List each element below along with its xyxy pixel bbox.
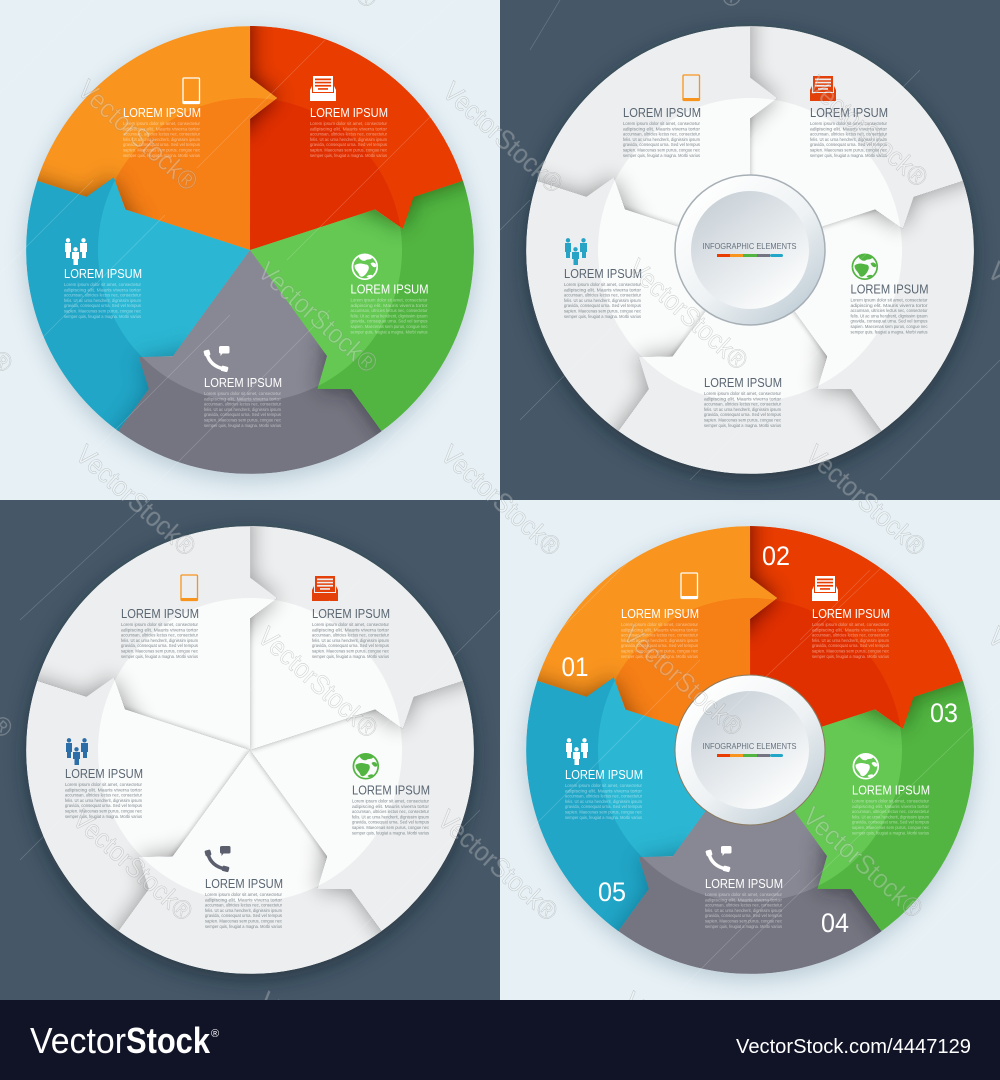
text block: grey: felis. Ut ac urna hendrerit, dignissim ipsum: [204, 407, 281, 412]
text block: grey: [204, 376, 282, 428]
text block: top right: LOREM IPSUM: [312, 607, 390, 621]
text block: left: adipiscing elit. Mauris viverra tortor: [564, 287, 641, 292]
segment: blue: [26, 178, 250, 431]
text block: bottom: accumsan, ultricies lectus nec, consectetur: [205, 903, 282, 908]
text block: right: sapien. Maecenas sem purus, congue nec: [850, 324, 928, 329]
text block: grey: semper quis, feugiat a magna. Morbi varius: [705, 924, 783, 929]
text block: grey: semper quis, feugiat a magna. Morbi varius: [204, 423, 282, 428]
text block: top right: felis. Ut ac urna hendrerit, dignissim ipsum: [810, 137, 887, 142]
text block: red: gravida, consequat urna. Sed vel tempus: [310, 142, 388, 147]
text block: right: semper quis, feugiat a magna. Morbi varius: [352, 830, 430, 835]
segment: green: [250, 180, 474, 431]
text block: green: Lorem ipsum dolor sit amet, consectetur: [852, 798, 929, 804]
text block: grey: [705, 877, 783, 929]
text block: top right: LOREM IPSUM: [810, 106, 888, 120]
panel: white pie with hub: [518, 24, 982, 488]
panel: coloured pie with hub and numbers: [516, 522, 984, 990]
segment: top left: [37, 526, 277, 750]
text block: red: [310, 106, 388, 158]
watermarks: VectorStock®: [252, 256, 384, 379]
text block: left: sapien. Maecenas sem purus, congue nec: [564, 308, 642, 314]
text block: right: felis. Ut ac urna hendrerit, dignissim ipsum: [850, 313, 928, 318]
watermarks: VectorStock®: [800, 439, 932, 562]
text block: orange: [123, 106, 201, 158]
text block: top left: sapien. Maecenas sem purus, congue nec: [623, 148, 701, 152]
segment: bottom: [618, 311, 882, 474]
segment: blue: [526, 678, 706, 931]
segment: green: [794, 680, 974, 931]
text block: top right: adipiscing elit. Mauris viverra tortor: [810, 126, 887, 131]
text block: red: adipiscing elit. Mauris viverra tortor: [310, 126, 387, 131]
text block: top right: accumsan, ultricies lectus nec, consectetur: [312, 633, 389, 638]
text block: left: felis. Ut ac urna hendrerit, dignissim ipsum: [65, 798, 142, 803]
text block: green: gravida, consequat urna. Sed vel tempus: [852, 820, 930, 825]
panel: coloured pie without hub: [16, 22, 484, 490]
footer bar: [0, 1000, 1000, 1080]
watermarks: VectorStock®: [70, 439, 202, 562]
text block: red: LOREM IPSUM: [812, 607, 890, 621]
text block: left: sapien. Maecenas sem purus, congue nec: [65, 808, 143, 814]
text block: red: Lorem ipsum dolor sit amet, consectetur: [310, 121, 387, 126]
footer bar: VectorStock.com/4447129: [736, 1036, 971, 1058]
text block: green: sapien. Maecenas sem purus, congue nec: [852, 825, 930, 830]
text block: blue: Lorem ipsum dolor sit amet, consectetur: [565, 783, 642, 788]
text block: top right: felis. Ut ac urna hendrerit, dignissim ipsum: [312, 638, 389, 643]
text block: grey: adipiscing elit. Mauris viverra tortor: [705, 897, 782, 902]
text block: top left: gravida, consequat urna. Sed vel tempus: [623, 142, 701, 147]
text block: right: LOREM IPSUM: [850, 282, 928, 296]
panel background: top right: [500, 0, 1000, 500]
text block: grey: LOREM IPSUM: [705, 877, 783, 891]
text block: bottom: accumsan, ultricies lectus nec, consectetur: [704, 402, 781, 407]
text block: grey: LOREM IPSUM: [204, 376, 282, 390]
text block: orange: LOREM IPSUM: [621, 607, 699, 621]
text block: green: adipiscing elit. Mauris viverra tortor: [852, 804, 929, 809]
icon: envelope: [312, 576, 338, 601]
text block: green: adipiscing elit. Mauris viverra tortor: [350, 303, 428, 308]
text block: top left: Lorem ipsum dolor sit amet, consectetur: [623, 121, 700, 126]
segment: top left: [537, 26, 777, 226]
text block: orange: gravida, consequat urna. Sed vel tempus: [123, 142, 201, 147]
icon: people: [565, 238, 587, 265]
text block: bottom: felis. Ut ac urna hendrerit, dignissim ipsum: [205, 908, 282, 913]
text block: right: semper quis, feugiat a magna. Morbi varius: [850, 329, 928, 334]
text block: left: accumsan, ultricies lectus nec, consectetur: [564, 293, 641, 298]
text block: bottom: semper quis, feugiat a magna. Morbi varius: [205, 924, 283, 929]
panel background: bottom left: [0, 500, 500, 1000]
text block: green: LOREM IPSUM: [852, 784, 930, 798]
text block: green: semper quis, feugiat a magna. Morbi varius: [350, 329, 428, 334]
text block: top right: sapien. Maecenas sem purus, congue nec: [312, 648, 390, 654]
text block: red: sapien. Maecenas sem purus, congue nec: [812, 648, 890, 654]
text block: orange: accumsan, ultricies lectus nec, consectetur: [621, 633, 698, 638]
icon: phone: [705, 846, 732, 872]
text block: top right: adipiscing elit. Mauris viverra tortor: [312, 627, 389, 632]
text block: green: accumsan, ultricies lectus nec, consectetur: [852, 809, 929, 814]
icon: globe: [853, 754, 878, 779]
text block: green: gravida, consequat urna. Sed vel tempus: [350, 319, 428, 324]
segment: right: [794, 181, 974, 431]
text block: bottom: semper quis, feugiat a magna. Morbi varius: [704, 423, 782, 428]
text block: blue: gravida, consequat urna. Sed vel tempus: [64, 303, 142, 308]
text block: grey: accumsan, ultricies lectus nec, consectetur: [204, 402, 281, 407]
text block: green: sapien. Maecenas sem purus, congue nec: [350, 324, 428, 329]
watermarks: VectorStock®: [437, 76, 569, 199]
icon: tablet: [683, 75, 700, 101]
text block: top right: Lorem ipsum dolor sit amet, consectetur: [312, 622, 389, 627]
text block: red: semper quis, feugiat a magna. Morbi varius: [812, 654, 890, 659]
segment: top right: [250, 526, 463, 750]
icon: tablet: [181, 575, 198, 601]
text block: orange: LOREM IPSUM: [123, 106, 201, 120]
icon: tablet: [183, 78, 200, 104]
segment: right: [250, 681, 474, 931]
watermarks: VectorStock®: [252, 621, 384, 744]
icon: people: [566, 738, 588, 765]
text block: top left: LOREM IPSUM: [623, 106, 701, 120]
text block: orange: adipiscing elit. Mauris viverra tortor: [123, 126, 200, 131]
text block: grey: sapien. Maecenas sem purus, congue nec: [204, 418, 282, 422]
text block: right: sapien. Maecenas sem purus, congue nec: [352, 825, 430, 830]
text block: right: Lorem ipsum dolor sit amet, consectetur: [850, 298, 928, 302]
text block: top left: gravida, consequat urna. Sed vel tempus: [121, 643, 199, 648]
watermarks: VectorStock®: [622, 253, 754, 376]
watermarks: VectorStock®: [67, 804, 199, 927]
text block: bottom: gravida, consequat urna. Sed vel tempus: [205, 913, 283, 918]
text block: top left: semper quis, feugiat a magna. Morbi varius: [121, 654, 199, 659]
text block: bottom: felis. Ut ac urna hendrerit, dignissim ipsum: [704, 407, 781, 412]
icon: envelope: [810, 76, 836, 101]
text block: green: [350, 282, 428, 334]
text block: top right: gravida, consequat urna. Sed vel tempus: [312, 643, 390, 648]
text block: bottom: Lorem ipsum dolor sit amet, consectetur: [704, 391, 781, 396]
segment: grey: [618, 811, 882, 974]
watermarks: VectorStock®: [617, 619, 749, 742]
footer bar: Vector: [30, 1020, 126, 1061]
number 04: 04: [821, 908, 849, 938]
footer bar: Stock: [126, 1020, 211, 1061]
text block: grey: accumsan, ultricies lectus nec, consectetur: [705, 903, 782, 908]
text block: top right: sapien. Maecenas sem purus, congue nec: [810, 148, 888, 152]
text block: blue: LOREM IPSUM: [64, 267, 142, 281]
text block: bottom: sapien. Maecenas sem purus, congue nec: [704, 418, 782, 422]
text block: grey: Lorem ipsum dolor sit amet, consectetur: [705, 892, 782, 897]
watermarks: VectorStock®: [802, 70, 934, 193]
text block: top left: LOREM IPSUM: [121, 607, 199, 621]
text block: top right: [810, 106, 888, 158]
text block: green: semper quis, feugiat a magna. Morbi varius: [852, 830, 930, 835]
text block: top left: adipiscing elit. Mauris viverra tortor: [623, 126, 700, 131]
text block: red: felis. Ut ac urna hendrerit, dignissim ipsum: [812, 638, 889, 643]
text block: right: LOREM IPSUM: [352, 784, 430, 798]
text block: right: adipiscing elit. Mauris viverra tortor: [850, 303, 928, 308]
text block: orange: sapien. Maecenas sem purus, congue nec: [123, 148, 201, 152]
text block: bottom: sapien. Maecenas sem purus, congue nec: [205, 918, 283, 924]
text block: top left: sapien. Maecenas sem purus, congue nec: [121, 648, 199, 654]
panel: white pie without hub: [18, 524, 482, 988]
text block: bottom: LOREM IPSUM: [704, 376, 782, 390]
segment: left: [526, 177, 706, 431]
text block: blue: felis. Ut ac urna hendrerit, dignissim ipsum: [64, 298, 141, 303]
text block: right: [850, 282, 928, 334]
text block: red: accumsan, ultricies lectus nec, consectetur: [812, 633, 889, 638]
text block: blue: adipiscing elit. Mauris viverra tortor: [565, 788, 642, 793]
text block: left: [564, 267, 642, 319]
text block: bottom: [205, 877, 283, 929]
text block: blue: Lorem ipsum dolor sit amet, consectetur: [64, 282, 141, 287]
text block: blue: [565, 768, 643, 820]
text block: left: [65, 767, 143, 819]
number 01: 01: [562, 652, 588, 682]
text block: blue: accumsan, ultricies lectus nec, consectetur: [565, 794, 642, 799]
panel background: bottom right: [500, 500, 1000, 1000]
text block: bottom: gravida, consequat urna. Sed vel tempus: [704, 412, 782, 417]
text block: top left: Lorem ipsum dolor sit amet, consectetur: [121, 622, 198, 627]
text block: top right: accumsan, ultricies lectus nec, consectetur: [810, 132, 887, 137]
text block: top left: felis. Ut ac urna hendrerit, dignissim ipsum: [623, 137, 700, 142]
text block: right: felis. Ut ac urna hendrerit, dignissim ipsum: [352, 814, 429, 819]
icon: envelope: [812, 576, 838, 601]
text block: right: gravida, consequat urna. Sed vel tempus: [352, 820, 430, 825]
text block: bottom: adipiscing elit. Mauris viverra tortor: [205, 897, 282, 902]
icon: tablet: [681, 573, 698, 599]
segment: red: [250, 26, 463, 250]
text block: red: semper quis, feugiat a magna. Morbi varius: [310, 153, 388, 158]
text block: green: felis. Ut ac urna hendrerit, dignissim ipsum: [350, 313, 428, 318]
text block: top right: semper quis, feugiat a magna. Morbi varius: [312, 654, 390, 659]
text block: grey: sapien. Maecenas sem purus, congue nec: [705, 918, 783, 924]
segment: left: [26, 677, 250, 931]
text block: bottom: adipiscing elit. Mauris viverra tortor: [704, 396, 781, 401]
text block: left: accumsan, ultricies lectus nec, consectetur: [65, 793, 142, 798]
text block: red: Lorem ipsum dolor sit amet, consectetur: [812, 622, 889, 627]
icon: globe: [852, 254, 877, 279]
text block: orange: accumsan, ultricies lectus nec, consectetur: [123, 132, 200, 137]
text block: right: gravida, consequat urna. Sed vel tempus: [850, 319, 928, 324]
number 03: 03: [930, 698, 958, 728]
number 02: 02: [762, 541, 790, 571]
panel background: top left: [0, 0, 500, 500]
text block: top left: adipiscing elit. Mauris viverra tortor: [121, 627, 198, 632]
text block: blue: [64, 267, 142, 319]
text block: right: accumsan, ultricies lectus nec, consectetur: [352, 809, 429, 814]
text block: left: felis. Ut ac urna hendrerit, dignissim ipsum: [564, 298, 641, 303]
segment: grey: [118, 250, 382, 474]
text block: blue: gravida, consequat urna. Sed vel tempus: [565, 804, 643, 809]
text block: left: gravida, consequat urna. Sed vel tempus: [564, 303, 642, 308]
segment: top right: [750, 26, 963, 229]
text block: red: adipiscing elit. Mauris viverra tortor: [812, 627, 889, 632]
text block: grey: gravida, consequat urna. Sed vel tempus: [705, 913, 783, 918]
text block: blue: accumsan, ultricies lectus nec, consectetur: [64, 293, 141, 298]
icon: phone: [203, 346, 230, 372]
text block: green: accumsan, ultricies lectus nec, consectetur: [350, 308, 428, 313]
text block: top left: felis. Ut ac urna hendrerit, dignissim ipsum: [121, 638, 198, 643]
text block: top left: accumsan, ultricies lectus nec, consectetur: [623, 132, 700, 137]
text block: red: gravida, consequat urna. Sed vel tempus: [812, 643, 890, 648]
text block: grey: gravida, consequat urna. Sed vel tempus: [204, 412, 282, 417]
text block: left: LOREM IPSUM: [564, 267, 642, 281]
text block: orange: [621, 607, 699, 659]
text block: bottom: LOREM IPSUM: [205, 877, 283, 891]
text block: blue: LOREM IPSUM: [565, 768, 643, 782]
text block: blue: sapien. Maecenas sem purus, congue nec: [565, 810, 643, 814]
footer bar: ®: [211, 1028, 219, 1040]
icon: globe: [353, 754, 378, 779]
hub: INFOGRAPHIC ELEMENTS: [702, 741, 797, 751]
watermarks: VectorStock®: [797, 801, 929, 924]
text block: blue: sapien. Maecenas sem purus, congue nec: [64, 308, 142, 314]
text block: right: adipiscing elit. Mauris viverra tortor: [352, 804, 429, 809]
text block: orange: Lorem ipsum dolor sit amet, consectetur: [123, 121, 200, 126]
text block: blue: semper quis, feugiat a magna. Morbi varius: [64, 314, 142, 319]
text block: bottom: [704, 376, 782, 428]
text block: orange: semper quis, feugiat a magna. Morbi varius: [621, 654, 699, 659]
text block: red: sapien. Maecenas sem purus, congue nec: [310, 148, 388, 152]
text block: orange: gravida, consequat urna. Sed vel tempus: [621, 643, 699, 648]
text block: top right: Lorem ipsum dolor sit amet, consectetur: [810, 121, 887, 126]
segment: orange: [37, 26, 277, 250]
text block: blue: adipiscing elit. Mauris viverra tortor: [64, 287, 141, 292]
number 05: 05: [598, 877, 626, 907]
text block: red: felis. Ut ac urna hendrerit, dignissim ipsum: [310, 137, 387, 142]
text block: orange: felis. Ut ac urna hendrerit, dignissim ipsum: [123, 137, 200, 142]
hub: [675, 675, 825, 825]
hub: [675, 175, 825, 325]
text block: top left: semper quis, feugiat a magna. Morbi varius: [623, 153, 701, 158]
icon: phone: [204, 846, 230, 872]
text block: orange: adipiscing elit. Mauris viverra tortor: [621, 627, 698, 632]
text block: top right: semper quis, feugiat a magna. Morbi varius: [810, 153, 888, 158]
text block: right: [352, 784, 430, 835]
text block: left: LOREM IPSUM: [65, 767, 143, 781]
text block: left: semper quis, feugiat a magna. Morbi varius: [65, 814, 143, 819]
text block: top left: accumsan, ultricies lectus nec, consectetur: [121, 633, 198, 638]
icon: people: [65, 238, 87, 265]
text block: red: [812, 607, 890, 659]
text block: green: LOREM IPSUM: [350, 282, 428, 296]
text block: orange: sapien. Maecenas sem purus, congue nec: [621, 648, 699, 654]
text block: grey: felis. Ut ac urna hendrerit, dignissim ipsum: [705, 908, 782, 913]
hub: INFOGRAPHIC ELEMENTS: [702, 241, 797, 251]
text block: top right: gravida, consequat urna. Sed vel tempus: [810, 142, 888, 147]
text block: right: Lorem ipsum dolor sit amet, consectetur: [352, 798, 429, 804]
text block: left: Lorem ipsum dolor sit amet, consectetur: [564, 282, 641, 287]
segment: orange: [537, 526, 777, 727]
text block: top right: [312, 607, 390, 659]
icon: people: [66, 738, 88, 765]
text block: orange: semper quis, feugiat a magna. Morbi varius: [123, 153, 201, 158]
segment: red: [750, 526, 963, 729]
text block: left: semper quis, feugiat a magna. Morbi varius: [564, 314, 642, 319]
text block: bottom: Lorem ipsum dolor sit amet, consectetur: [205, 892, 282, 897]
text block: right: accumsan, ultricies lectus nec, consectetur: [850, 308, 928, 313]
text block: grey: adipiscing elit. Mauris viverra tortor: [204, 396, 281, 401]
text block: red: LOREM IPSUM: [310, 106, 388, 120]
text block: green: Lorem ipsum dolor sit amet, consectetur: [350, 298, 428, 302]
text block: red: accumsan, ultricies lectus nec, consectetur: [310, 132, 387, 137]
segment: bottom: [118, 750, 382, 974]
icon: globe: [352, 254, 377, 279]
text block: green: felis. Ut ac urna hendrerit, dignissim ipsum: [852, 814, 929, 819]
text block: orange: Lorem ipsum dolor sit amet, consectetur: [621, 622, 698, 627]
text block: blue: semper quis, feugiat a magna. Morbi varius: [565, 815, 643, 820]
text block: orange: felis. Ut ac urna hendrerit, dignissim ipsum: [621, 638, 698, 643]
text block: blue: felis. Ut ac urna hendrerit, dignissim ipsum: [565, 799, 642, 804]
text block: green: [852, 784, 930, 835]
watermarks: VectorStock®: [435, 439, 567, 562]
text block: left: gravida, consequat urna. Sed vel tempus: [65, 803, 143, 808]
text block: left: Lorem ipsum dolor sit amet, consectetur: [65, 782, 142, 787]
icon: envelope: [310, 76, 336, 101]
watermarks: VectorStock®: [72, 74, 204, 197]
watermarks: VectorStock®: [432, 804, 564, 927]
text block: top left: [121, 607, 199, 659]
text block: top left: [623, 106, 701, 158]
text block: grey: Lorem ipsum dolor sit amet, consectetur: [204, 391, 281, 396]
text block: left: adipiscing elit. Mauris viverra tortor: [65, 787, 142, 792]
